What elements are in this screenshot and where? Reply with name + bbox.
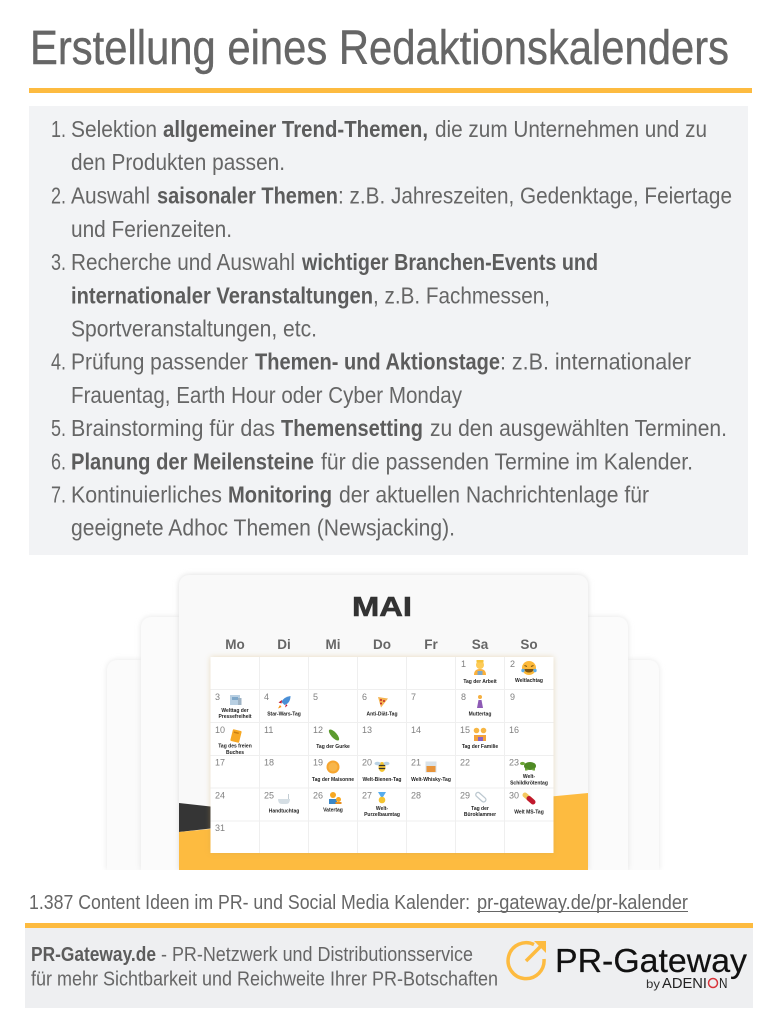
step 7: Kontinuierliches: [71, 482, 222, 508]
event labels: Muttertag: [469, 712, 491, 718]
icon: bathtub: [278, 794, 290, 804]
logo: PR-Gateway: ADENI: [662, 976, 707, 992]
event labels: Tag der Familie: [462, 744, 498, 750]
step 2: und Ferienzeiten.: [71, 216, 232, 242]
day numbers: 31: [215, 823, 225, 833]
event labels: Purzelbaumtag: [364, 812, 400, 818]
icon: family: [474, 728, 486, 741]
day numbers: 5: [313, 692, 318, 702]
event labels: Welttag der: [221, 708, 249, 714]
day numbers: 15: [460, 725, 470, 735]
icon: worker: [474, 660, 486, 675]
icon: pill: [525, 795, 533, 802]
day numbers: 13: [362, 725, 372, 735]
day numbers: 17: [215, 758, 225, 768]
logo: PR-Gateway: by: [646, 977, 660, 991]
day numbers: 1: [461, 659, 466, 669]
day numbers: 9: [510, 692, 515, 702]
weekday headers: [225, 637, 538, 652]
step 5: Brainstorming für das: [71, 415, 275, 441]
content ideas note: 1.387 Content Ideen im PR- und Social Media Kalender:: [29, 892, 470, 914]
step 2: saisonaler Themen: [157, 182, 338, 208]
event labels: Büroklammer: [464, 812, 496, 818]
icon: cucumber: [327, 728, 341, 742]
day numbers: 23: [509, 758, 519, 768]
step 1: die zum Unternehmen und zu: [435, 116, 707, 142]
weekday headers: Mo: [225, 637, 245, 652]
month heading: MAI: [352, 591, 412, 622]
step 4: Frauentag, Earth Hour oder Cyber Monday: [71, 382, 462, 408]
icon: book: [230, 729, 242, 743]
step 5: [51, 415, 727, 441]
day numbers: 14: [411, 725, 421, 735]
icon: medal: [378, 792, 386, 803]
step 2: Auswahl: [71, 182, 150, 208]
day numbers: 10: [215, 725, 225, 735]
card decoration: yellow wedge: [179, 793, 588, 870]
icon: father and child: [329, 792, 342, 804]
event labels: Welt-Bienen-Tag: [363, 777, 401, 783]
title underline: [29, 88, 752, 93]
step 4: Prüfung passender: [71, 348, 248, 374]
footer rule: [25, 923, 753, 928]
weekday headers: Mi: [326, 637, 340, 652]
step 7: 7.: [51, 482, 66, 508]
main card: [179, 575, 588, 870]
step 3: Sportveranstaltungen, etc.: [71, 316, 317, 342]
event labels: Tag des freien: [218, 744, 252, 750]
icon: turtle: [520, 762, 536, 770]
event labels: Star-Wars-Tag: [267, 712, 301, 718]
step 3: , z.B. Fachmessen,: [373, 282, 550, 308]
event labels: Tag der: [471, 806, 489, 812]
step 7: der aktuellen Nachrichtenlage für: [339, 482, 649, 508]
icon: bee: [374, 762, 390, 772]
event labels: Welt MS-Tag: [514, 810, 544, 816]
step 4: Themen- und Aktionstage: [255, 348, 500, 374]
step 4: [51, 348, 691, 408]
day numbers: 8: [461, 692, 466, 702]
day numbers: 25: [264, 790, 274, 800]
event labels: Tag der Gurke: [316, 744, 350, 750]
step 7: Monitoring: [228, 482, 332, 508]
calendar illustration: [100, 575, 670, 882]
icon: whisky glass: [426, 762, 436, 772]
day numbers: 21: [411, 758, 421, 768]
icon: sun: [326, 760, 340, 774]
step 3: internationaler Veranstaltungen: [71, 282, 373, 308]
day numbers: 26: [313, 790, 323, 800]
event labels: Schildkrötentag: [510, 780, 548, 786]
step 1: den Produkten passen.: [71, 149, 285, 175]
step 6: für die passenden Termine im Kalender.: [321, 448, 693, 474]
step 1: Selektion: [71, 116, 157, 142]
event labels: Anti-Diät-Tag: [366, 712, 398, 718]
step 1: [51, 116, 707, 175]
day numbers: 19: [313, 758, 323, 768]
step 1: allgemeiner Trend-Themen,: [163, 116, 428, 142]
icon: paperclip: [475, 791, 487, 803]
weekday headers: So: [520, 637, 538, 652]
day numbers: 20: [362, 758, 372, 768]
logo: PR-Gateway: PR-Gateway: [555, 942, 748, 979]
step 3: [51, 249, 598, 342]
day numbers: 6: [362, 692, 367, 702]
day numbers: 3: [215, 692, 220, 702]
event labels: Vatertag: [323, 808, 343, 814]
step 7: geeignete Adhoc Themen (Newsjacking).: [71, 514, 455, 540]
step 2: [51, 182, 732, 242]
icon: laughing face: [521, 661, 537, 675]
step 2: 2.: [51, 182, 66, 208]
weekday headers: Do: [373, 637, 391, 652]
step 5: 5.: [51, 415, 66, 441]
step 3: Recherche und Auswahl: [71, 249, 295, 275]
calendar grid: [210, 657, 554, 853]
back card middle: [141, 617, 628, 870]
day numbers: 11: [264, 725, 273, 735]
content ideas note: pr-gateway.de/pr-kalender: [477, 892, 688, 914]
icon: newspaper: [230, 695, 242, 705]
day numbers: 30: [509, 790, 519, 800]
day numbers: 2: [510, 659, 515, 669]
panel: steps list: [29, 106, 748, 555]
event labels: Buches: [226, 750, 244, 756]
day numbers: 29: [460, 790, 470, 800]
step 4: : z.B. internationaler: [500, 348, 691, 374]
step 5: Themensetting: [281, 415, 423, 441]
icon: rocket: [278, 696, 290, 708]
weekday headers: Fr: [424, 637, 438, 652]
footer text: PR-Gateway.de: [31, 944, 156, 966]
event labels: Tag der Arbeit: [463, 679, 497, 685]
step 6: Planung der Meilensteine: [71, 448, 314, 474]
day numbers: 12: [313, 725, 323, 735]
day numbers: 18: [264, 758, 274, 768]
footer text: [31, 944, 498, 990]
event labels: Handtuchtag: [269, 808, 299, 814]
footer text: - PR-Netzwerk und Distributionsservice: [161, 944, 473, 966]
step 6: 6.: [51, 448, 66, 474]
day numbers: [215, 659, 519, 833]
logo: PR-Gateway: [508, 941, 748, 992]
card decoration: dark wedge: [179, 803, 215, 832]
step 3: 3.: [51, 249, 66, 275]
event labels: Welt-Whisky-Tag: [411, 777, 451, 783]
logo: PR-Gateway: N: [719, 976, 728, 992]
event labels: Tag der Maisonne: [312, 777, 354, 783]
event labels: Pressefreiheit: [218, 714, 252, 720]
day numbers: 7: [411, 692, 416, 702]
step 5: zu den ausgewählten Terminen.: [430, 415, 727, 441]
step 7: [51, 482, 649, 540]
footer text: für mehr Sichtbarkeit und Reichweite Ihrer PR-Botschaften: [31, 968, 498, 990]
panel: footer: [25, 928, 753, 1008]
icon: pizza: [378, 697, 388, 708]
event labels: [218, 678, 548, 818]
step 6: [51, 448, 693, 474]
event labels: Weltlachtag: [515, 678, 543, 684]
event labels: Welt-: [523, 774, 535, 780]
day numbers: 16: [509, 725, 519, 735]
day numbers: 24: [215, 790, 225, 800]
icon: mother: [477, 695, 483, 708]
day numbers: 4: [264, 692, 269, 702]
day numbers: 28: [411, 790, 421, 800]
day numbers: 27: [362, 790, 372, 800]
day numbers: 22: [460, 758, 470, 768]
step 1: 1.: [51, 116, 66, 142]
step 4: 4.: [51, 348, 66, 374]
step 3: wichtiger Branchen-Events und: [301, 249, 598, 275]
weekday headers: Di: [277, 637, 291, 652]
event labels: Welt-: [376, 806, 388, 812]
weekday headers: Sa: [472, 637, 489, 652]
back card left-most: [107, 660, 659, 870]
